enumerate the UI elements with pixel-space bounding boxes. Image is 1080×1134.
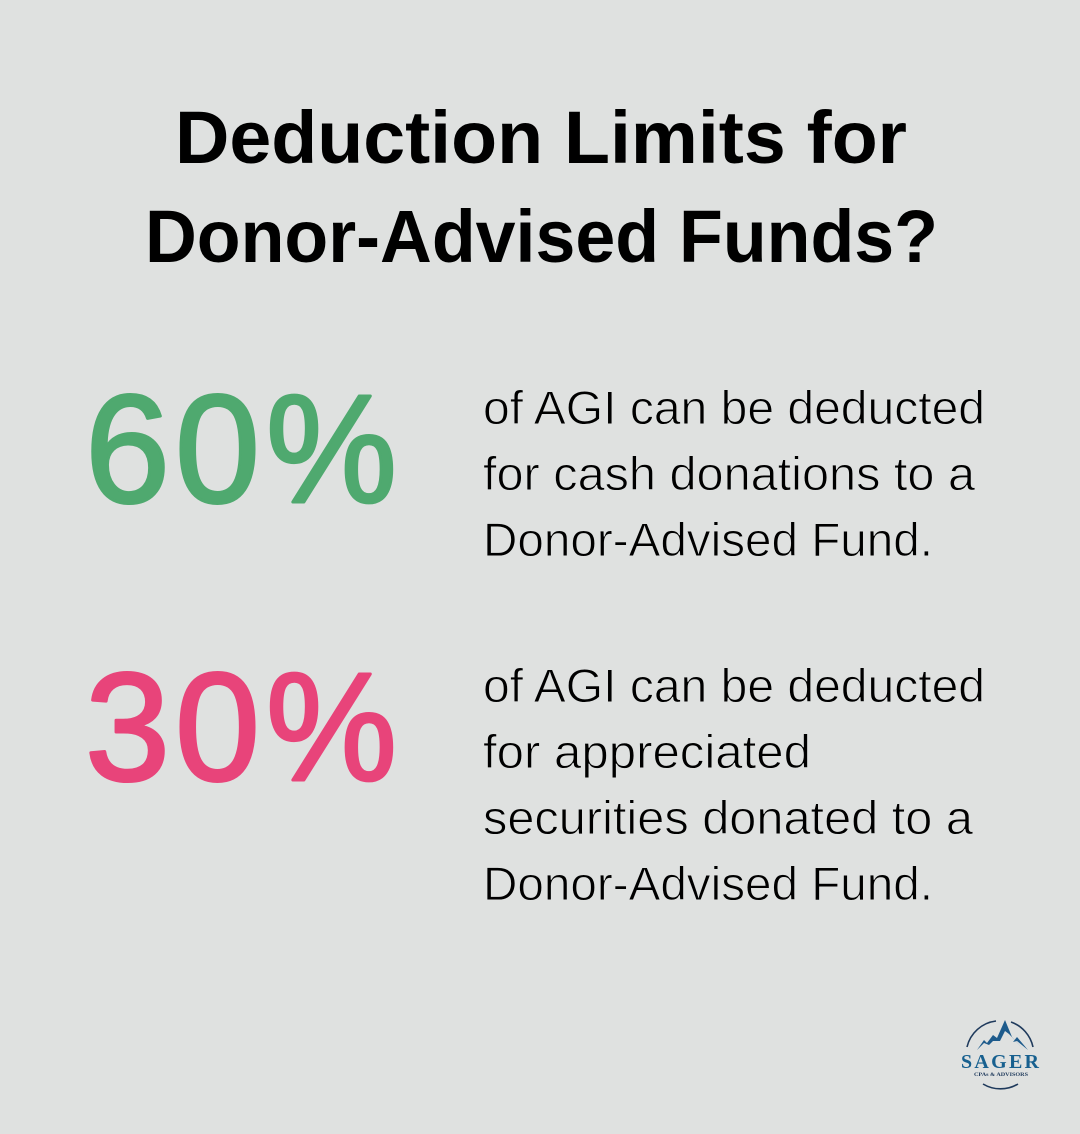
title: Deduction Limits for	[175, 96, 907, 179]
text block: appreciated securities	[483, 659, 985, 910]
text block: cash donations: for cash donations to a	[483, 447, 976, 500]
stat: 30 percent	[85, 641, 397, 813]
stat: 30 percent: 0	[175, 641, 260, 813]
text block: cash donations: of AGI can be deducted	[483, 381, 985, 434]
text block: appreciated securities: for appreciated	[483, 725, 811, 778]
stat: 30 percent: %	[266, 641, 397, 813]
stat: 60 percent	[85, 363, 397, 535]
logo wordmark: SAGER	[961, 1051, 1040, 1073]
text block: appreciated securities: Donor-Advised Fund.	[483, 857, 933, 910]
logo mountain	[977, 1020, 1024, 1050]
title	[145, 96, 938, 278]
logo ring	[967, 1021, 1033, 1089]
stat: 60 percent: 6	[85, 363, 170, 535]
stat: 60 percent: 0	[175, 363, 260, 535]
stat: 60 percent: %	[266, 363, 397, 535]
text block: appreciated securities: of AGI can be deducted	[483, 659, 985, 712]
logo: Sager CPAs and Advisors	[961, 1020, 1040, 1089]
stat: 30 percent: 3	[85, 641, 170, 813]
text block: appreciated securities: securities donated to a	[483, 791, 974, 844]
title: Donor-Advised Funds?	[145, 195, 938, 278]
text block: cash donations	[483, 381, 985, 566]
logo tagline: CPAs & ADVISORS	[974, 1073, 1028, 1078]
text block: cash donations: Donor-Advised Fund.	[483, 513, 933, 566]
